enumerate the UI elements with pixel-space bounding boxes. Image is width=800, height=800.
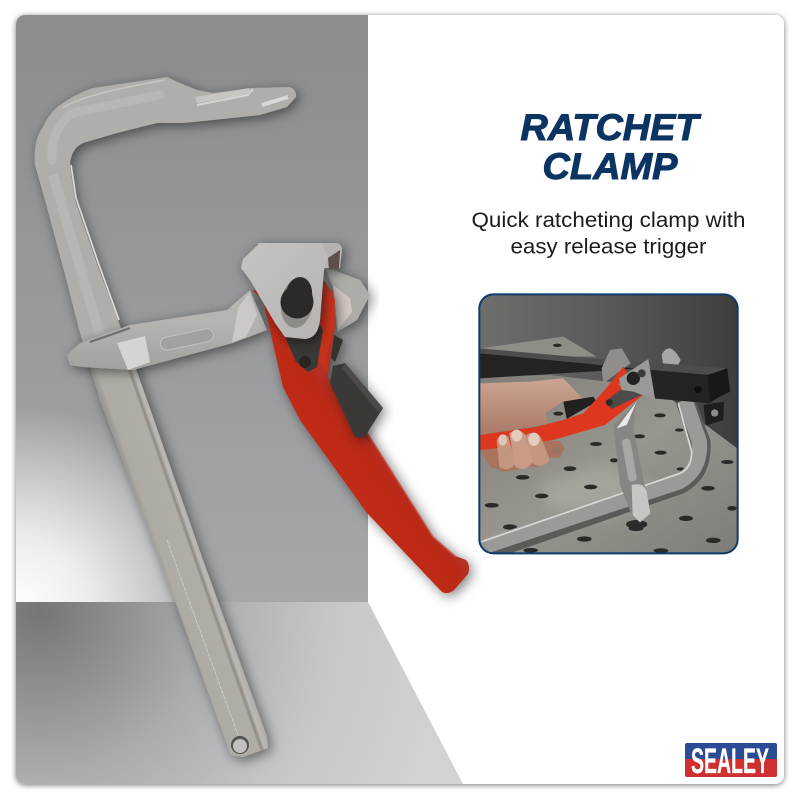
dark plate and rivet	[252, 280, 323, 372]
ratchet clamp product	[35, 77, 469, 757]
description text	[472, 209, 746, 258]
red handle in the photo	[480, 348, 645, 450]
description text: easy release trigger	[510, 236, 706, 258]
trigger latch	[330, 335, 383, 438]
welding table	[480, 337, 737, 553]
clamp frame in the photo	[482, 348, 701, 550]
title: CLAMP	[542, 146, 678, 187]
sliding arm	[67, 290, 267, 370]
black tube workpiece	[480, 348, 730, 426]
title: RATCHET	[520, 107, 702, 148]
sliding arm in the photo	[613, 402, 650, 529]
photo border	[479, 294, 738, 553]
head bracket in the photo	[619, 359, 655, 400]
description text: Quick ratcheting clamp with	[472, 209, 746, 232]
clamp bar and frame	[35, 77, 296, 757]
silver head bracket	[241, 243, 342, 339]
frame highlights	[52, 80, 288, 735]
end screw	[231, 736, 249, 754]
fingers over the handle	[497, 430, 562, 469]
background: studio wall and floor	[16, 15, 463, 784]
photo: clamp in use on a welding table	[479, 294, 739, 554]
black knob	[280, 286, 314, 318]
ratchet pawl	[325, 267, 370, 332]
red handle	[252, 280, 469, 593]
hand	[480, 378, 584, 472]
title	[520, 107, 702, 187]
